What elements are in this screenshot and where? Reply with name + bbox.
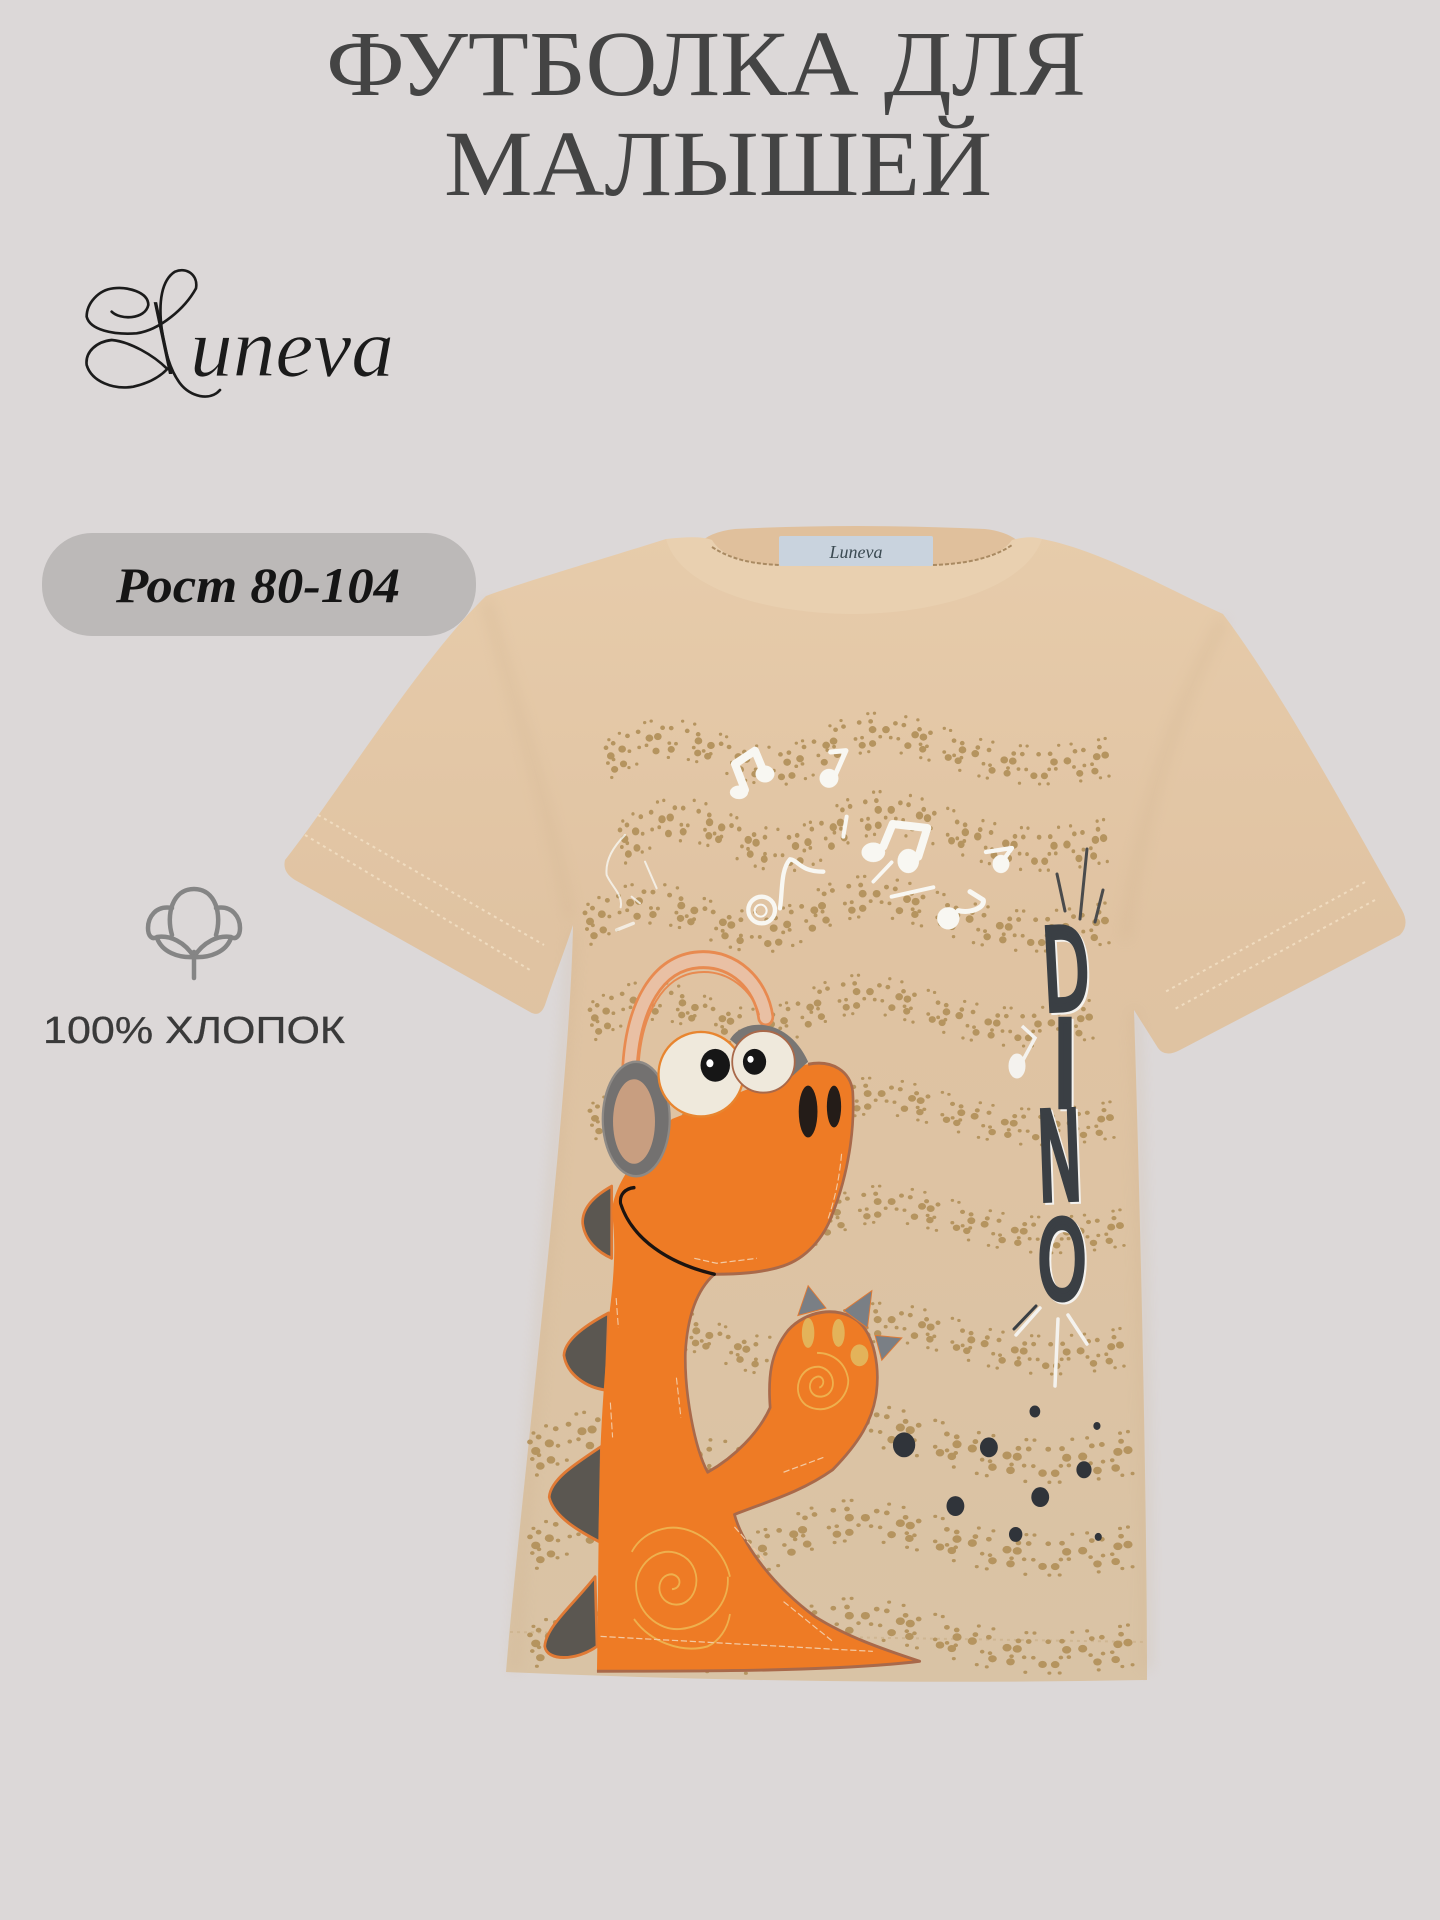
neck label: Luneva xyxy=(828,542,882,562)
height badge: Рост 80-104 xyxy=(115,557,400,613)
brand logo: uneva xyxy=(190,302,394,395)
headphone cup xyxy=(603,1062,670,1176)
pupils xyxy=(701,1049,766,1082)
hand claws xyxy=(798,1286,902,1360)
dark dots xyxy=(893,1406,1102,1542)
collar inner stitching xyxy=(712,545,1012,565)
music notes xyxy=(606,751,1012,930)
DINO lettering: N xyxy=(1035,1088,1084,1229)
burst rays xyxy=(1014,849,1103,1386)
title xyxy=(326,13,1086,216)
left eye xyxy=(659,1032,743,1117)
side music note xyxy=(1009,1026,1035,1078)
dino body xyxy=(597,1063,920,1671)
cotton label: 100% ХЛОПОК xyxy=(43,1010,345,1052)
smile xyxy=(620,1188,714,1274)
DINO lettering: O xyxy=(1038,1199,1086,1324)
t-shirt xyxy=(284,526,1406,1682)
dino applique xyxy=(545,960,920,1671)
belly spiral xyxy=(632,1528,730,1649)
shirt silhouette xyxy=(284,539,1406,1682)
back spikes xyxy=(545,1186,612,1658)
right eye xyxy=(732,1031,795,1093)
palm spiral xyxy=(798,1353,848,1409)
DINO lettering xyxy=(1035,904,1092,1324)
DINO lettering: D xyxy=(1040,904,1092,1038)
title: ФУТБОЛКА ДЛЯ xyxy=(326,13,1086,116)
DINO lettering: I xyxy=(1052,997,1078,1135)
headphone band xyxy=(630,960,766,1074)
sleeve hem stitching xyxy=(305,815,1375,1642)
rear headphone cap xyxy=(730,1025,808,1084)
neck label xyxy=(779,536,933,566)
dino front outline xyxy=(597,1063,920,1671)
ear pad xyxy=(613,1079,655,1164)
cotton icon xyxy=(148,889,240,978)
brand logo: L xyxy=(129,269,232,405)
height badge xyxy=(42,533,476,636)
collar rib xyxy=(698,526,1024,571)
sleeve seam shading xyxy=(486,600,1223,1670)
title: МАЛЫШЕЙ xyxy=(444,113,992,216)
dotted wave print xyxy=(530,713,1138,1674)
neck band xyxy=(666,537,1042,614)
brand logo xyxy=(87,269,394,405)
finger pads xyxy=(802,1318,868,1366)
nostrils xyxy=(799,1086,841,1137)
stitch details xyxy=(601,1154,873,1651)
